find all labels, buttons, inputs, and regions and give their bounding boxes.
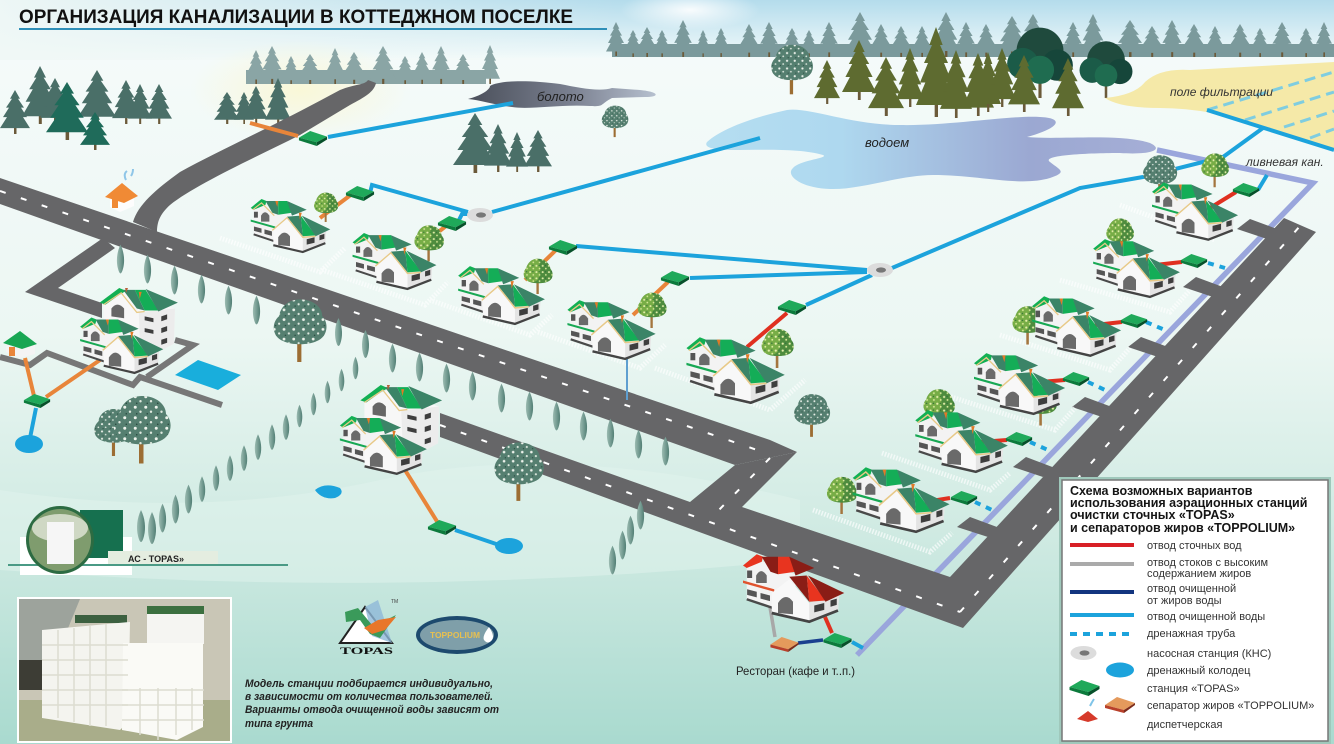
caption: типа грунта xyxy=(245,718,313,730)
swamp xyxy=(468,81,656,108)
legend labels: отвод стоков с высоким xyxy=(1147,557,1268,569)
pipes: orange xyxy=(25,123,668,523)
round trees xyxy=(94,106,1229,514)
main road xyxy=(0,178,797,465)
logo: TOPPOLIUM: TOPPOLIUM xyxy=(430,631,480,640)
title: ОРГАНИЗАЦИЯ КАНАЛИЗАЦИИ В КОТТЕДЖНОМ ПОСЕЛКЕ xyxy=(19,7,573,28)
pipes: red xyxy=(747,192,1236,633)
logo: TOPAS: TM xyxy=(391,599,398,605)
label: pond: водоем xyxy=(865,135,909,150)
grease separator, restaurant xyxy=(770,637,799,652)
caption: Варианты отвода очищенной воды зависят от xyxy=(245,704,499,716)
fences around lots xyxy=(220,205,1215,552)
thin loop roads xyxy=(0,340,222,405)
AC-TOPAS model badge xyxy=(8,506,288,575)
houses: upper row xyxy=(251,199,785,403)
legend labels: отвод очищенной воды xyxy=(1147,611,1265,623)
legend labels: от жиров воды xyxy=(1147,595,1222,607)
legend labels: отвод очищенной xyxy=(1147,583,1236,595)
caption: в зависимости от количества пользователей. xyxy=(245,691,493,703)
logo: TOPAS xyxy=(340,599,398,656)
olive pines and dark round trees, top centre xyxy=(771,27,1132,118)
legend heading: использования аэрационных станций xyxy=(1070,496,1307,510)
label: storm drain: ливневая кан. xyxy=(1245,155,1324,169)
main drain xyxy=(1207,110,1334,150)
road markings xyxy=(0,191,1300,612)
legend labels: диспетчерская xyxy=(1147,719,1222,731)
lot driveways xyxy=(957,517,997,537)
legend labels: сепаратор жиров «TOPPOLIUM» xyxy=(1147,700,1314,712)
storm drain xyxy=(857,150,1313,655)
small dispatch house xyxy=(105,169,138,212)
swimming pool xyxy=(175,360,241,390)
legend labels: отвод сточных вод xyxy=(1147,540,1242,552)
restaurant xyxy=(736,554,855,678)
label: swamp: болото xyxy=(537,89,584,104)
legend swatches xyxy=(1070,545,1134,634)
road network xyxy=(0,80,1316,628)
pipes: blue vertical xyxy=(626,358,628,400)
cypress rows xyxy=(117,245,669,574)
legend labels: станция «TOPAS» xyxy=(1147,683,1240,695)
pipes: dashed drain from stations xyxy=(975,263,1225,510)
pump stations (KNS) xyxy=(467,208,893,277)
dashed drains xyxy=(1207,72,1334,138)
legend labels: насосная станция (КНС) xyxy=(1147,648,1271,660)
dark pines, top left xyxy=(0,66,552,173)
branch to large house xyxy=(25,238,115,318)
logo: TOPPOLIUM xyxy=(416,616,498,654)
restaurant grease pipes xyxy=(770,607,823,643)
logo: TOPAS: TOPAS xyxy=(340,646,393,656)
legend labels: дренажный колодец xyxy=(1147,665,1251,677)
legend panel xyxy=(1059,477,1331,744)
houses: right column xyxy=(853,182,1238,532)
label: filtration field: поле фильтрации xyxy=(1170,85,1273,99)
drainage wells xyxy=(15,435,523,554)
filtration field xyxy=(1105,62,1334,150)
distant tree line, top right xyxy=(606,12,1334,57)
legend labels: дренажная труба xyxy=(1147,628,1236,640)
small green house, left xyxy=(3,331,37,358)
caption xyxy=(245,678,499,730)
label: restaurant: Ресторан (кафе и т..п.) xyxy=(736,664,855,678)
TOPAS stations xyxy=(24,131,1259,648)
badge label: АС - TOPAS» xyxy=(128,554,184,564)
branch road xyxy=(133,80,376,232)
legend heading xyxy=(1070,484,1307,535)
pale tree line, top left xyxy=(246,45,500,84)
legend heading: Схема возможных вариантов xyxy=(1070,484,1253,498)
legend labels: содержанием жиров xyxy=(1147,568,1251,580)
photo of stations xyxy=(17,597,232,743)
legend heading: очистки сточных «TOPAS» xyxy=(1070,508,1235,522)
caption: Модель станции подбирается индивидуально, xyxy=(245,678,493,690)
large houses xyxy=(80,288,442,474)
pond xyxy=(706,110,1156,189)
legend heading: и сепараторов жиров «TOPPOLIUM» xyxy=(1070,521,1295,535)
pipes: treated water xyxy=(30,103,1267,648)
legend icons xyxy=(1070,646,1135,731)
legend labels xyxy=(1147,540,1314,731)
